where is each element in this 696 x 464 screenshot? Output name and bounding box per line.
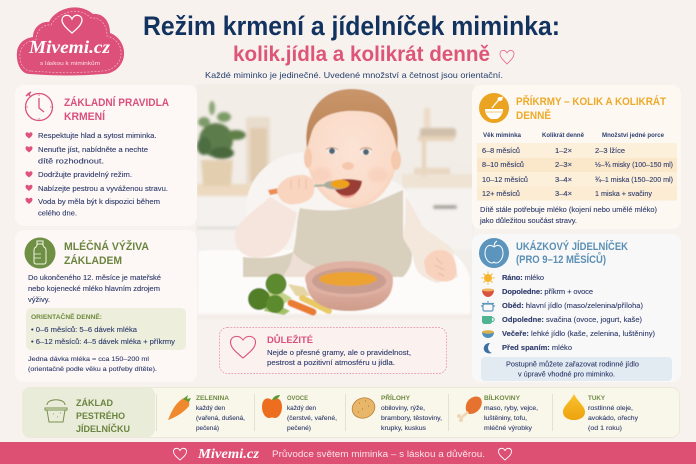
table: 8–10 měsíců: [482, 160, 524, 169]
icon: bread: [349, 395, 378, 421]
heading line 2: DENNĚ: [516, 109, 551, 122]
icon: blue bowl: [482, 330, 494, 338]
photo: baby eating in a high chair: [196, 84, 474, 320]
strip heading block: PESTRÉHO: [76, 411, 125, 422]
bowl with puree: [305, 261, 393, 311]
food: fats: (od 1 roku): [588, 425, 622, 432]
icon: apple: [262, 395, 282, 418]
menu rows: [481, 272, 656, 353]
icon: sun: [482, 272, 494, 284]
afternoon: Odpoledne: svačina (ovoce, jogurt, kaše): [502, 315, 642, 324]
icon: pot: [481, 301, 495, 311]
heading: PŘÍKRMY – KOLIK A KOLIKRÁT: [516, 95, 666, 108]
icon: oil drop: [563, 394, 585, 420]
panel: milk nutrition: [15, 230, 197, 382]
blurred shelf with plant: [197, 101, 270, 251]
food: fruit: OVOCE: [287, 395, 308, 402]
dose note: (orientačně podle věku a potřeby dítěte).: [28, 366, 157, 373]
strip heading block: JÍDELNÍČKU: [76, 423, 130, 435]
table rows: [477, 143, 677, 158]
callout text: Nejde o přesné gramy, ale o pravidelnost,: [267, 348, 411, 357]
food: vegetables: každý den: [196, 405, 225, 412]
bullet hearts: [26, 132, 32, 204]
icon: baby bottle: [24, 238, 56, 268]
lunch: Oběd: hlavní jídlo (maso/zelenina/příloha): [502, 301, 644, 310]
food: vegetables: [168, 395, 245, 432]
callout heading: DŮLEŽITÉ: [267, 334, 313, 346]
food: fruit: [262, 395, 337, 432]
milk note: Dítě stále potřebuje mléko (kojení nebo umělé mléko): [480, 205, 657, 214]
head: [306, 92, 398, 208]
intro text: nebo kojenecké mléko hlavním zdrojem: [28, 284, 160, 293]
callout box: [220, 328, 446, 374]
food: fats: avokádo, ořechy: [588, 415, 639, 422]
footer wordmark: Mivemi.cz: [197, 447, 260, 462]
tray: [198, 250, 470, 316]
table: 10–12 měsíců: [482, 175, 528, 184]
food: proteins: luštěniny, tofu,: [484, 415, 527, 422]
panel: basic feeding rules: [15, 85, 197, 226]
rule 3: Dodržujte pravidelný režim.: [38, 170, 132, 179]
icon: subtitle heart: [500, 50, 514, 64]
heading line 2: KRMENÍ: [64, 110, 106, 123]
food: side dishes: PŘÍLOHY: [381, 394, 411, 402]
right sleeve and hand: [403, 196, 458, 283]
family food note: v úpravě vhodné pro miminko.: [518, 370, 615, 378]
nose: [342, 162, 354, 170]
family food note: [481, 357, 672, 381]
icon: footer heart left: [174, 448, 186, 460]
logo heart: [62, 15, 82, 33]
icon: red bowl: [482, 288, 494, 297]
logo tagline: s láskou k miminkům: [40, 60, 100, 67]
panel background: [15, 85, 197, 226]
food: fruit: pečené): [287, 425, 311, 432]
panel background: [15, 230, 197, 382]
table: 3–4×: [555, 175, 572, 184]
food: side dishes: krupky, kuskus: [381, 425, 427, 432]
heading line 2: (PRO 9–12 MĚSÍCŮ): [516, 252, 606, 266]
food: fats: TUKY: [588, 395, 606, 402]
broccoli and vegetables: [248, 274, 329, 315]
logo wordmark: Mivemi.cz: [28, 37, 110, 57]
icon: clock: [26, 92, 52, 120]
table header: Věk miminka: [483, 132, 521, 139]
milk note: jako důležitou součást stravy.: [479, 216, 577, 225]
intro text: výživy.: [28, 295, 50, 304]
morning: Ráno: mléko: [502, 273, 544, 282]
food: side dishes: obiloviny, rýže,: [381, 405, 425, 412]
food: proteins: mléčné výrobky: [484, 425, 533, 432]
icon: moon: [484, 343, 492, 353]
table: Kolikrát denně: [542, 132, 584, 139]
family food note: Postupně můžete zařazovat rodinné jídlo: [506, 360, 639, 368]
table: ½–¾ misky (100–150 ml): [595, 160, 673, 169]
food: proteins: BÍLKOVINY: [484, 394, 521, 402]
table: 12+ měsíců: [482, 189, 520, 198]
food: fats: rostlinné oleje,: [588, 405, 633, 412]
high chair back: [246, 152, 410, 260]
table: 2–3 lžíce: [595, 146, 625, 155]
hair: [306, 89, 398, 150]
food: fats: [563, 394, 639, 432]
food: vegetables: ZELENINA: [196, 395, 230, 402]
callout text line 2: pestrost a pozitivní atmosféru u jídla.: [267, 358, 395, 367]
icon: cup: [482, 316, 494, 324]
bullet list: [26, 131, 168, 218]
logo: Mivemi.cz cloud: [17, 7, 124, 76]
footer band: [0, 442, 696, 464]
panel: sample menu: [472, 234, 681, 382]
table: 1 miska + svačiny: [595, 189, 652, 198]
panel: complementary food table: [472, 85, 681, 229]
forenoon: Dopoledne: příkrm + ovoce: [502, 287, 593, 296]
icon: footer heart right: [498, 448, 512, 460]
daily guide box: • 0–6 měsíců: 5–6 dávek mléka: [31, 325, 138, 334]
strip heading text: ZÁKLAD: [76, 398, 113, 409]
bib: [243, 190, 412, 277]
left sleeve: [235, 197, 297, 258]
hand holding spoon: [268, 175, 350, 204]
food: side dishes: brambory, těstoviny,: [381, 415, 442, 422]
food: vegetables: (vařená, dušená,: [196, 415, 245, 422]
rule 5 continued: celého dne.: [38, 208, 77, 218]
footer tagline: Průvodce světem miminka – s láskou a důvěrou.: [272, 449, 485, 459]
daily guide box: [26, 308, 186, 350]
food: fruit: každý den: [287, 405, 316, 412]
daily guide box: • 6–12 měsíců: 4–5 dávek mléka + příkrmy: [31, 337, 175, 346]
intro text: [28, 273, 161, 304]
icon: heart outline: [230, 336, 256, 358]
dose note: Jedna dávka mléka = cca 150–200 ml: [28, 356, 150, 363]
bedtime: Před spaním: mléko: [502, 343, 572, 352]
icon: apple: [479, 238, 509, 268]
rule 2: Nenuťte jíst, nabídněte a nechte: [38, 145, 148, 154]
table: 2–3×: [555, 160, 572, 169]
icon: basket: [45, 400, 67, 422]
heading: MLÉČNÁ VÝŽIVA: [64, 240, 149, 253]
rule 4: Nabízejte pestrou a vyváženou stravu.: [38, 184, 168, 193]
title: Režim krmení a jídelníček miminka:: [143, 11, 560, 41]
table: ¾–1 miska (150–200 ml): [595, 175, 673, 184]
heading: ZÁKLADNÍ PRAVIDLA: [64, 96, 169, 109]
callout: important: [220, 328, 446, 374]
dinner: Večeře: lehké jídlo (kaše, zelenina, luštěniny): [502, 329, 656, 338]
kitchen background: [196, 84, 474, 320]
heading line 2: ZÁKLADEM: [64, 254, 122, 267]
table: [477, 132, 677, 200]
food: vegetables: pečená): [196, 425, 219, 432]
intro text: Do ukončeného 12. měsíce je mateřské: [28, 273, 161, 282]
strip heading block: [22, 387, 155, 437]
icon: bowl and spoon: [479, 93, 509, 123]
rule 5: Voda by měla být k dispozici během: [38, 197, 160, 206]
strip background: [22, 388, 680, 438]
table: 6–8 měsíců: [482, 146, 520, 155]
table: 3–4×: [555, 189, 572, 198]
mouth: [333, 179, 362, 196]
rule 1: Respektujte hlad a sytost miminka.: [38, 131, 156, 140]
panel background: [472, 234, 681, 382]
heading: UKÁZKOVÝ JÍDELNÍČEK: [516, 240, 628, 253]
icon: carrot: [168, 395, 191, 420]
cloud shape: [17, 7, 124, 76]
cheeks: [312, 167, 332, 183]
food: proteins: [457, 394, 538, 432]
rule 2 continued: dítě rozhodnout.: [38, 156, 104, 166]
stitched outline: [20, 11, 121, 72]
blurred shelf right: [402, 108, 474, 250]
icon: chicken leg: [457, 397, 482, 422]
food: proteins: maso, ryby, vejce,: [484, 405, 538, 412]
table: Množství jedné porce: [602, 132, 664, 139]
panel background: [472, 85, 681, 229]
food: fruit: (čerstvé, vařené,: [287, 415, 337, 422]
intro line: Každé miminko je jedinečné. Uvedené množství a četnost jsou orientační.: [205, 70, 503, 80]
daily guide box: ORIENTAČNĚ DENNĚ:: [31, 312, 102, 321]
dose note: [28, 356, 157, 373]
subtitle: kolik.jídla a kolikrát denně: [233, 43, 490, 66]
panel: varied diet strip: [22, 387, 680, 438]
milk note: [479, 205, 657, 225]
food: side dishes: [349, 394, 442, 432]
eyes: [326, 148, 372, 155]
table: 1–2×: [555, 146, 572, 155]
